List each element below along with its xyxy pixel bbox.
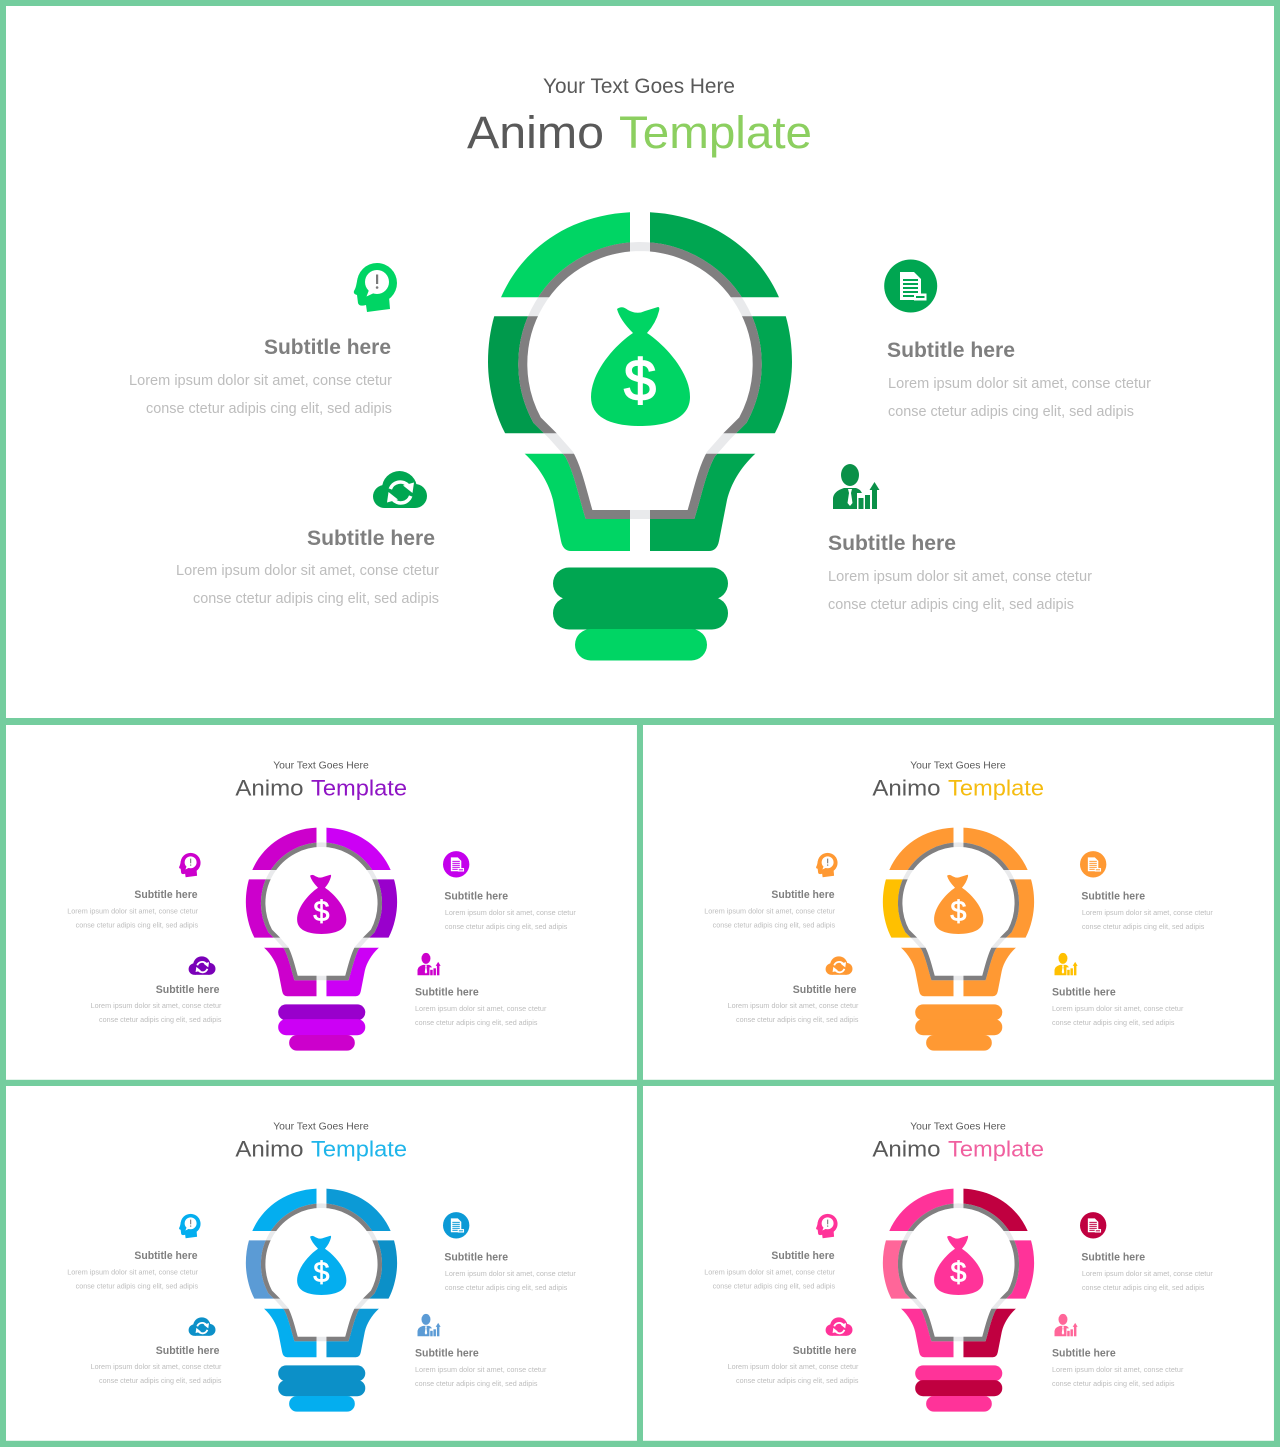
title [467,107,812,158]
text block: left bottom: Subtitle here [793,1345,857,1357]
panel: orange slide [643,725,1274,1080]
text block: left top: Lorem ipsum dolor sit amet, conse ctetur [129,373,392,389]
text block: left bottom: Lorem ipsum dolor sit amet, conse ctetur [91,1001,222,1010]
text block: right bottom [1052,1348,1184,1388]
text block: left top: conse ctetur adipis cing elit, sed adipis [713,1282,835,1291]
panel: green main slide [6,6,1274,718]
text block: left bottom: Lorem ipsum dolor sit amet, conse ctetur [176,563,439,579]
text block: right top: Lorem ipsum dolor sit amet, conse ctetur [445,908,576,917]
icon: cloud sync [826,1317,852,1336]
text block: left top: Subtitle here [771,889,835,901]
panel: purple slide [6,725,637,1080]
icon: head with alert [816,1214,838,1238]
text block: right bottom: Subtitle here [415,1348,479,1360]
text block: left bottom: Subtitle here [793,984,857,996]
icon: document [443,1212,469,1239]
text block: right bottom: conse ctetur adipis cing elit, sed adipis [415,1018,538,1027]
title [235,776,407,801]
text block: left bottom: conse ctetur adipis cing elit, sed adipis [193,591,439,607]
text block: right top: Lorem ipsum dolor sit amet, conse ctetur [1082,1269,1213,1278]
text block: right top: Subtitle here [1081,891,1145,903]
title: Template [948,776,1044,801]
text block: right bottom [415,987,547,1027]
text block: right bottom: conse ctetur adipis cing elit, sed adipis [828,597,1074,613]
kicker text: Your Text Goes Here [273,1121,369,1132]
text block: right top: conse ctetur adipis cing elit, sed adipis [445,1283,568,1292]
title: Animo [467,107,604,158]
text block: right bottom: Subtitle here [1052,1348,1116,1360]
light bulb [246,828,397,1051]
text block: left top [129,335,392,417]
icon: document [884,260,937,312]
text block: left bottom [91,1345,222,1385]
text block: left bottom: conse ctetur adipis cing elit, sed adipis [736,1376,859,1385]
icon: businessman with growth chart [1055,953,1078,975]
text block: right bottom: Subtitle here [828,531,956,555]
icon: money bag [591,307,690,426]
text block: right bottom: Subtitle here [415,987,479,999]
light bulb [488,212,792,660]
text block: left top [67,889,199,930]
text block: right top: conse ctetur adipis cing elit, sed adipis [1082,1283,1205,1292]
text block: left top: Subtitle here [134,889,198,901]
icon: money bag: $ [624,348,656,413]
title: Animo [872,1137,941,1162]
title [872,776,1044,801]
text block: right top [887,338,1151,420]
title: Template [311,1137,407,1162]
text block: right top [444,891,576,931]
text block: left top: conse ctetur adipis cing elit, sed adipis [713,921,835,930]
text block: left top: Lorem ipsum dolor sit amet, conse ctetur [704,1268,836,1277]
text block: left top: Subtitle here [771,1250,835,1262]
text block: left top: Lorem ipsum dolor sit amet, conse ctetur [67,1268,199,1277]
text block: left bottom: Lorem ipsum dolor sit amet, conse ctetur [728,1001,859,1010]
text block: left bottom [728,984,859,1024]
panel: blue slide [6,1086,637,1441]
icon: head with alert [179,853,201,877]
text block: left bottom [176,526,439,607]
text block: right bottom: Lorem ipsum dolor sit amet, conse ctetur [1052,1004,1184,1013]
icon: head with alert [179,1214,201,1238]
text block: left top [704,1250,836,1291]
text block: left bottom: Lorem ipsum dolor sit amet, conse ctetur [728,1362,859,1371]
text block: left bottom: Subtitle here [307,526,435,550]
icon: document [1080,1212,1106,1239]
kicker text: Your Text Goes Here [910,1121,1006,1132]
light bulb [246,1189,397,1412]
title: Animo [235,1137,304,1162]
text block: left top: Lorem ipsum dolor sit amet, conse ctetur [704,907,836,916]
bulb base [553,568,728,660]
text block: left bottom: conse ctetur adipis cing elit, sed adipis [736,1015,859,1024]
icon: cloud sync [189,1317,215,1336]
text block: left bottom: Lorem ipsum dolor sit amet, conse ctetur [91,1362,222,1371]
icon: money bag [297,875,346,934]
bulb base [915,1004,1002,1051]
icon: money bag [297,1236,346,1295]
title: Template [311,776,407,801]
text block: left top [67,1250,199,1291]
icon: businessman with growth chart [418,1314,441,1336]
title: Animo [872,776,941,801]
icon: money bag [934,875,983,934]
bulb base [915,1365,1002,1412]
panel: pink slide [643,1086,1274,1441]
text block: left top: conse ctetur adipis cing elit, sed adipis [76,1282,198,1291]
text block: right bottom: Lorem ipsum dolor sit amet, conse ctetur [415,1365,547,1374]
icon: money bag: $ [950,1257,967,1289]
icon: document [1080,851,1106,878]
text block: right top [444,1252,576,1292]
text block: left top: conse ctetur adipis cing elit, sed adipis [146,401,392,417]
icon: businessman with growth chart [1055,1314,1078,1336]
text block: right top [1081,1252,1213,1292]
kicker text: Your Text Goes Here [910,760,1006,771]
title: Template [948,1137,1044,1162]
text block: right bottom: conse ctetur adipis cing elit, sed adipis [1052,1379,1175,1388]
text block: left top: conse ctetur adipis cing elit, sed adipis [76,921,198,930]
text block: right bottom [828,531,1092,613]
text block: right bottom [1052,987,1184,1027]
title: Template [619,107,812,158]
light bulb [883,1189,1034,1412]
text block: right top: conse ctetur adipis cing elit, sed adipis [888,404,1134,420]
text block: right top: Lorem ipsum dolor sit amet, conse ctetur [1082,908,1213,917]
kicker text: Your Text Goes Here [543,75,735,98]
text block: left bottom [91,984,222,1024]
text block: right bottom: Lorem ipsum dolor sit amet, conse ctetur [415,1004,547,1013]
icon: money bag [934,1236,983,1295]
icon: money bag: $ [313,1257,330,1289]
icon: head with alert [816,853,838,877]
text block: right top: conse ctetur adipis cing elit, sed adipis [445,922,568,931]
text block: right bottom: Lorem ipsum dolor sit amet, conse ctetur [828,569,1092,585]
text block: right bottom: conse ctetur adipis cing elit, sed adipis [1052,1018,1175,1027]
text block: right top: Subtitle here [887,338,1015,362]
icon: cloud sync [373,471,427,508]
text block: right top: Subtitle here [444,1252,508,1264]
text block: left top: Subtitle here [264,335,391,359]
light bulb [883,828,1034,1051]
icon: money bag: $ [950,896,967,928]
text block: left bottom: Subtitle here [156,984,220,996]
bulb base [278,1365,365,1412]
icon: cloud sync [189,956,215,975]
text block: left top [704,889,836,930]
icon: document [443,851,469,878]
text block: right top: Subtitle here [444,891,508,903]
text block: right top: Lorem ipsum dolor sit amet, conse ctetur [888,376,1151,392]
text block: left top: Lorem ipsum dolor sit amet, conse ctetur [67,907,199,916]
bulb base [278,1004,365,1051]
text block: right top: Lorem ipsum dolor sit amet, conse ctetur [445,1269,576,1278]
text block: right bottom: Lorem ipsum dolor sit amet, conse ctetur [1052,1365,1184,1374]
text block: right top [1081,891,1213,931]
title: Animo [235,776,304,801]
text block: right top: Subtitle here [1081,1252,1145,1264]
icon: head with alert [354,263,397,312]
title [872,1137,1044,1162]
text block: left bottom: conse ctetur adipis cing elit, sed adipis [99,1015,222,1024]
icon: businessman with growth chart [833,464,880,509]
icon: businessman with growth chart [418,953,441,975]
text block: right bottom [415,1348,547,1388]
icon: money bag: $ [313,896,330,928]
text block: right bottom: Subtitle here [1052,987,1116,999]
text block: right top: conse ctetur adipis cing elit, sed adipis [1082,922,1205,931]
text block: left bottom: Subtitle here [156,1345,220,1357]
title [235,1137,407,1162]
kicker text: Your Text Goes Here [273,760,369,771]
text block: left bottom [728,1345,859,1385]
icon: cloud sync [826,956,852,975]
text block: left top: Subtitle here [134,1250,198,1262]
text block: right bottom: conse ctetur adipis cing elit, sed adipis [415,1379,538,1388]
text block: left bottom: conse ctetur adipis cing elit, sed adipis [99,1376,222,1385]
